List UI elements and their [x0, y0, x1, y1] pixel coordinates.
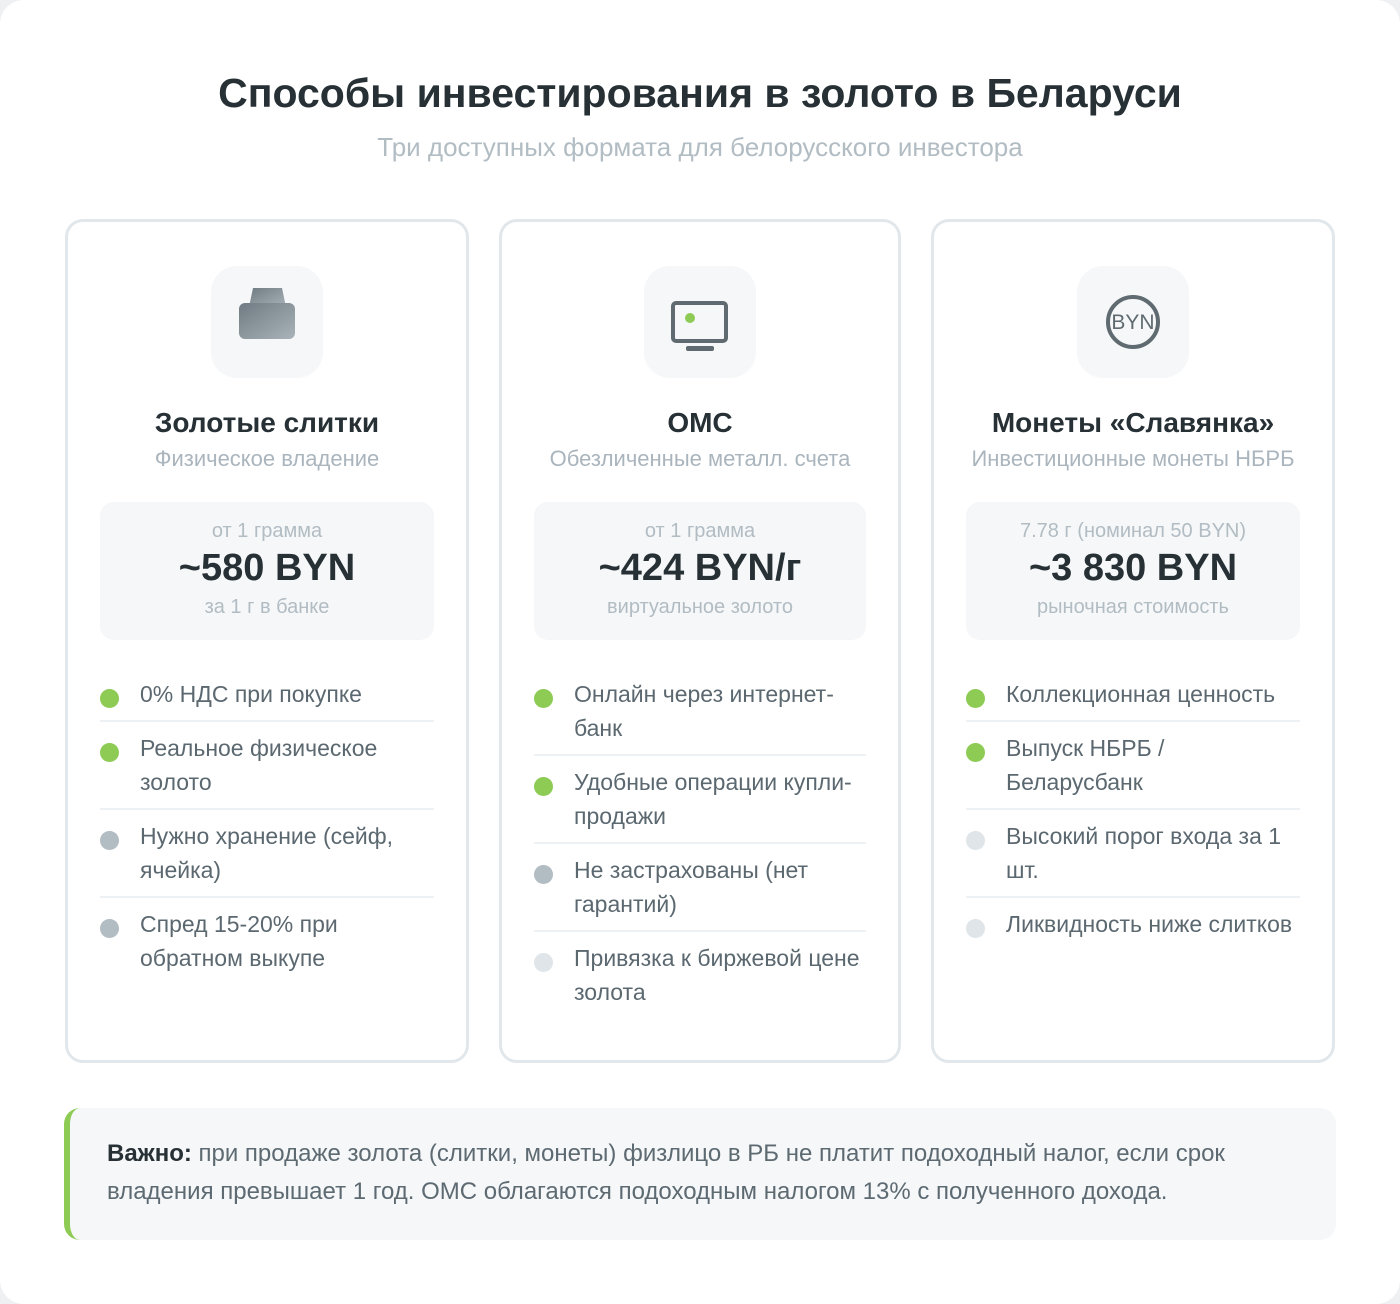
price box [100, 502, 434, 640]
heading: Монеты «Славянка» [992, 407, 1274, 438]
list: features: продажи [574, 803, 666, 829]
panel: gold bars [65, 219, 469, 1063]
icon: BYN coin: BYN [1111, 311, 1155, 334]
list: features [534, 681, 866, 1005]
title: Способы инвестирования в золото в Беларуси [218, 70, 1182, 116]
list: features: Онлайн через интернет- [574, 681, 834, 707]
list: features [966, 681, 1300, 938]
price box: виртуальное золото [607, 596, 793, 618]
list: features: обратном выкупе [140, 945, 325, 971]
panel: gold bars: Физическое владение [155, 446, 379, 471]
list: features: золото [140, 769, 212, 795]
list: features: гарантий) [574, 891, 677, 917]
callout: important note [64, 1108, 1336, 1240]
price box: 7.78 г (номинал 50 BYN) [1020, 520, 1246, 542]
price box [966, 502, 1300, 640]
list: features: Высокий порог входа за 1 [1006, 823, 1281, 849]
list: features: Беларусбанк [1006, 769, 1143, 795]
panel: OMS: Обезличенные металл. счета [550, 446, 850, 471]
subtitle: Три доступных формата для белорусского инвестора [377, 132, 1023, 162]
callout: important note: владения превышает 1 год. ОМС облагаются подоходным налогом 13% с полученного дохода. [107, 1178, 1167, 1205]
price box: рыночная стоимость [1037, 596, 1229, 618]
price box: от 1 грамма [645, 520, 755, 542]
heading: ОМС [667, 407, 733, 438]
price box: ~424 BYN/г [599, 547, 801, 589]
callout: important note: Важно: при продаже золота (слитки, монеты) физлицо в РБ не платит подоходный налог, если срок [107, 1140, 1225, 1167]
list: features: банк [574, 715, 622, 741]
icon: gold bar [211, 266, 323, 378]
price box: ~3 830 BYN [1029, 547, 1237, 589]
icon: BYN coin [1077, 266, 1189, 378]
list: features: Спред 15-20% при [140, 911, 338, 937]
list: features: Коллекционная ценность [1006, 681, 1275, 707]
list: features: шт. [1006, 857, 1039, 883]
list: features: Нужно хранение (сейф, [140, 823, 393, 849]
list: features: ячейка) [140, 857, 221, 883]
list: features: Реальное физическое [140, 735, 377, 761]
panel: coins: Инвестиционные монеты НБРБ [971, 446, 1295, 471]
list: features: Ликвидность ниже слитков [1006, 911, 1292, 937]
price box [534, 502, 866, 640]
list: features: 0% НДС при покупке [140, 681, 362, 707]
list: features: Удобные операции купли- [574, 769, 852, 795]
list: features: Привязка к биржевой цене [574, 945, 860, 971]
list: features: золота [574, 979, 646, 1005]
list: features [100, 681, 434, 971]
panel: OMS [499, 219, 901, 1063]
price box: за 1 г в банке [205, 596, 329, 618]
price box: от 1 грамма [212, 520, 322, 542]
icon: monitor [644, 266, 756, 378]
heading: Золотые слитки [155, 407, 379, 438]
list: features: Не застрахованы (нет [574, 857, 808, 883]
panel: coins [931, 219, 1335, 1063]
price box: ~580 BYN [179, 547, 355, 589]
list: features: Выпуск НБРБ / [1006, 735, 1164, 761]
